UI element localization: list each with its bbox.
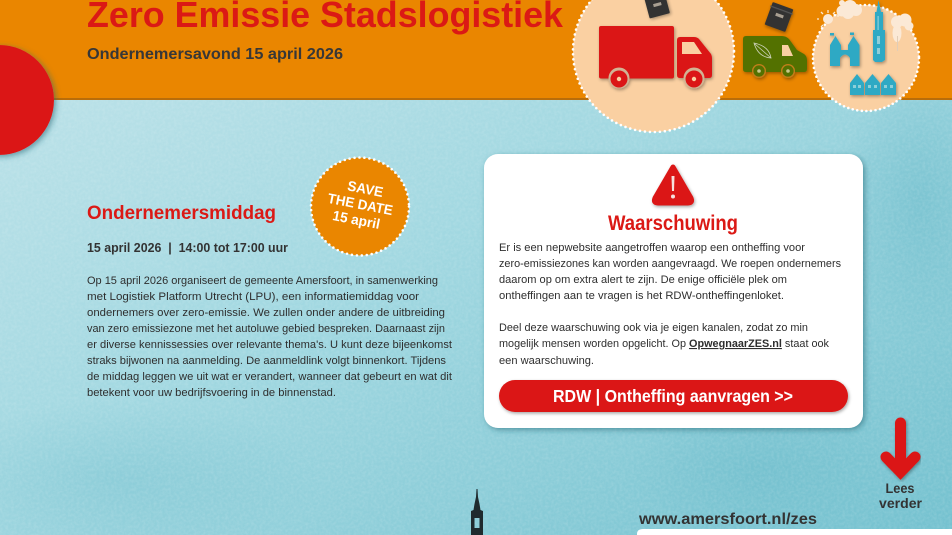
icon: green van with parcel [743,2,807,78]
label: lees verder: Lees [886,481,914,496]
label: lees verder: verder [879,496,923,511]
text block: warning paragraph: zero-emissiezones kan worden aangevraagd. We roepen ondernemers [499,258,841,270]
text block: event description: met Logistiek Platform Utrecht (LPU), een informatiemiddag voor [87,291,419,303]
icon: dark parcel [764,2,794,32]
button: RDW ontheffing aanvragen: RDW | Ontheffing aanvragen >> [553,386,793,406]
text block: event description: Op 15 april 2026 organiseert de gemeente Amersfoort, in samenwerking [87,275,438,287]
label: lees verder [879,481,923,511]
header band [0,0,952,100]
badge: red truck [573,0,734,132]
text block: warning paragraph: Deel deze waarschuwing ook via je eigen kanalen, zodat zo min [499,322,808,334]
icon: dark parcel [644,0,670,19]
badge: city [813,0,919,111]
arrow: lees verder [886,423,915,472]
button: RDW ontheffing aanvragen [499,380,848,412]
text block: event description: betekent voor uw bedrijfsvoering in de binnenstad. [87,387,336,399]
text block: warning paragraph: Er is een nepwebsite aangetroffen waarop een ontheffing voor [499,242,805,254]
website url: www.amersfoort.nl/zes [638,511,817,528]
icon: warning triangle [654,167,692,203]
heading: Ondernemersmiddag: Ondernemersmiddag [87,202,276,224]
badge: save the date: 15 april [331,207,381,232]
text block: event description: ondernemers over zero-emissie. We zullen onder andere de uitbreiding [87,307,445,319]
text block: event description: de middag leggen we uit wat er verandert, wanneer dat gebeurt en wat dit [87,371,452,383]
heading: Waarschuwing: Waarschuwing [608,212,738,235]
icon: red truck [599,26,712,88]
date and time: 15 april 2026 | 14:00 tot 17:00 uur [87,240,288,255]
white footer panel [637,529,952,535]
text block: warning paragraph: daarom op om extra alert te zijn. De enige officiële plek om [499,274,787,286]
subtitle: Ondernemersavond 15 april 2026 [87,46,343,63]
badge: save the date: THE DATE [326,190,394,218]
badge: save the date: SAVE [346,177,385,200]
text block: warning paragraph: mogelijk mensen worden opgelicht. Op OpwegnaarZES.nl staat ook [499,338,829,350]
panel: waarschuwing [484,154,863,428]
text block: event description [87,275,452,399]
icon: castle gate [830,32,860,66]
text block: warning paragraph: ontheffingen aan te vragen is het RDW-ontheffingenloket. [499,290,784,302]
text block: event description: straks bijwonen na aanmelding. De aanmeldlink volgt binnenkort. Tijdens [87,355,446,367]
icon: clouds [836,0,914,51]
text block: warning paragraph [499,242,841,367]
text block: event description: er diverse kennissessies over relevante thema's. U kunt deze bijeenkomst [87,339,452,351]
badge: save the date [311,158,409,256]
text block: warning paragraph: een waarschuwing. [499,355,594,367]
icon: sun [817,10,839,27]
icon: houses [850,74,896,95]
icon: church tower [873,0,885,62]
icon: tower silhouette [471,489,483,535]
text block: event description: van zero emissiezone met het autoluwe gebied bespreken. Daarnaast zijn [87,323,445,335]
red corner circle [0,45,54,155]
